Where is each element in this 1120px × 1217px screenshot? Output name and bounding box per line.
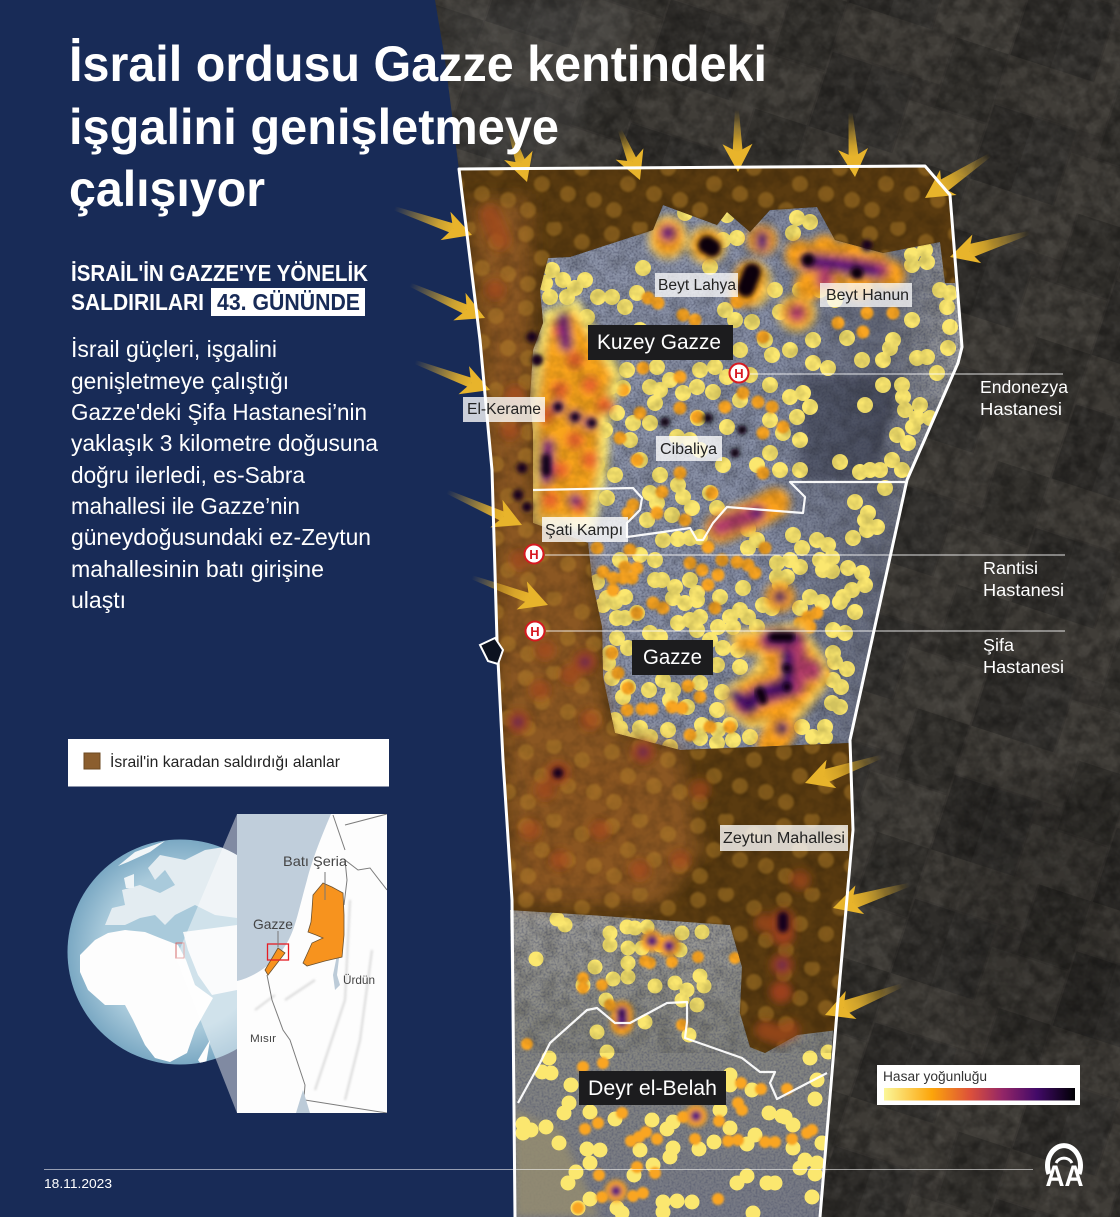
hospital marker: Endonezya: H (734, 366, 744, 381)
title: çalışıyor (69, 161, 265, 217)
body text (71, 336, 378, 613)
Israeli ground assault area overlay (459, 166, 955, 1053)
heat map Gazza south (722, 597, 830, 745)
orange tint along the coast (470, 200, 700, 905)
label: Gazze (632, 640, 713, 675)
hospital marker: Endonezya (730, 364, 748, 382)
damage dots orange south (527, 957, 812, 1208)
inset locator map: Mısır (250, 1033, 276, 1045)
label: Sati Kampi: Şati Kampı (545, 522, 623, 539)
navy sea panel (0, 0, 515, 1217)
label: El-Kerame: El-Kerame (467, 401, 541, 418)
label: El-Kerame (463, 397, 545, 422)
urban area south (505, 905, 845, 1217)
heat map hotspots north (668, 233, 890, 528)
inset locator map: Ürdün (343, 973, 375, 987)
subheading: 43. GÜNÜNDE (217, 289, 360, 315)
magnifying cone (176, 814, 237, 1113)
damage dots yellow north (545, 213, 950, 475)
hospital marker: Rantisi: H (529, 547, 539, 562)
governorate boundaries (518, 482, 905, 1103)
globe (68, 840, 237, 1064)
label: Gazze: Gazze (643, 646, 702, 669)
title (69, 36, 767, 217)
label: Endonezya Hastanesi: Hastanesi (980, 399, 1062, 419)
heat spots south (616, 941, 696, 1191)
legend: ground assault areas: İsrail'in karadan saldırdığı alanlar (110, 752, 341, 771)
body text: İsrail güçleri, işgalini (71, 336, 277, 362)
label: Zeytun Mahallesi: Zeytun Mahallesi (723, 830, 845, 847)
inset locator map (237, 814, 387, 1113)
Gaza outline (459, 166, 962, 1217)
label: Rantisi Hastanesi (983, 558, 1064, 600)
label: Deyr el-Belah: Deyr el-Belah (588, 1077, 717, 1100)
date: 18.11.2023 (44, 1177, 112, 1191)
hospital marker: Sifa (526, 622, 544, 640)
label: Kuzey Gazze (588, 325, 733, 360)
title: işgalini genişletmeye (69, 99, 559, 155)
label: Beyt Hanun (820, 283, 912, 307)
label: Cibaliya (656, 436, 722, 461)
brown zone heat (490, 215, 800, 1035)
label: Cibaliya: Cibaliya (660, 441, 717, 458)
Gaza strip (265, 948, 285, 975)
body text: mahallesi ile Gazze’nin (71, 493, 300, 519)
body text: güneydoğusundaki ez-Zeytun (71, 524, 371, 550)
legend: ground assault areas (68, 739, 389, 786)
damage dots yellow south (523, 919, 828, 1213)
brown zone dots (459, 166, 955, 1053)
subheading (71, 260, 368, 316)
inset locator map: Gazze (253, 916, 293, 932)
hospital marker: Sifa: H (530, 624, 540, 639)
body text: genişletmeye çalıştığı (71, 368, 289, 394)
legend: damage intensity (877, 1065, 1080, 1105)
urban area north and Gazza city (520, 200, 970, 760)
dark hot cores north (665, 245, 857, 453)
AA logo: AA (1046, 1160, 1084, 1193)
body text: yaklaşık 3 kilometre doğusuna (71, 430, 378, 456)
hospital marker: Rantisi (524, 544, 544, 564)
label: Rantisi Hastanesi: Hastanesi (983, 580, 1064, 600)
label: Beyt Lahya: Beyt Lahya (658, 277, 736, 294)
label: Rantisi Hastanesi: Rantisi (983, 558, 1038, 578)
heat spots west band (532, 337, 592, 472)
dark hot cores Gazza (760, 637, 790, 700)
Gaza locator box (268, 944, 288, 960)
damage dots orange (597, 293, 893, 735)
label: Kuzey Gazze: Kuzey Gazze (597, 331, 721, 354)
AA logo (1046, 1146, 1084, 1193)
label: Endonezya Hastanesi: Endonezya (980, 377, 1068, 397)
label: Sifa Hastanesi (983, 635, 1064, 677)
body text: Gazze'deki Şifa Hastanesi’nin (71, 399, 367, 425)
label: Sati Kampi (542, 517, 628, 542)
title: İsrail ordusu Gazze kentindeki (69, 36, 767, 92)
body text: doğru ilerledi, es-Sabra (71, 462, 305, 488)
label: Zeytun Mahallesi (720, 825, 848, 851)
subheading: SALDIRILARI (71, 289, 204, 315)
legend: damage intensity: Hasar yoğunluğu (883, 1069, 987, 1084)
label: Sifa Hastanesi: Şifa (983, 635, 1014, 655)
inset locator map: Batı Şeria (283, 853, 347, 869)
brown zone dark cores (518, 245, 867, 927)
label: Beyt Hanun: Beyt Hanun (826, 287, 909, 304)
attack arrows (390, 110, 1034, 1029)
label: Deyr el-Belah (579, 1071, 726, 1105)
subheading: İSRAİL'İN GAZZE'YE YÖNELİK (71, 260, 368, 286)
body text: mahallesinin batı girişine (71, 556, 324, 582)
label: Sifa Hastanesi: Hastanesi (983, 657, 1064, 677)
West Bank (303, 883, 344, 966)
label: Endonezya Hastanesi (980, 377, 1068, 419)
footer line (44, 1168, 1033, 1170)
body text: ulaştı (71, 587, 126, 613)
label: Beyt Lahya (655, 273, 738, 297)
port (480, 638, 503, 664)
damage dots yellow Gazza (597, 485, 885, 747)
hospital leader lines (545, 374, 1065, 631)
heat map west band (533, 305, 618, 525)
